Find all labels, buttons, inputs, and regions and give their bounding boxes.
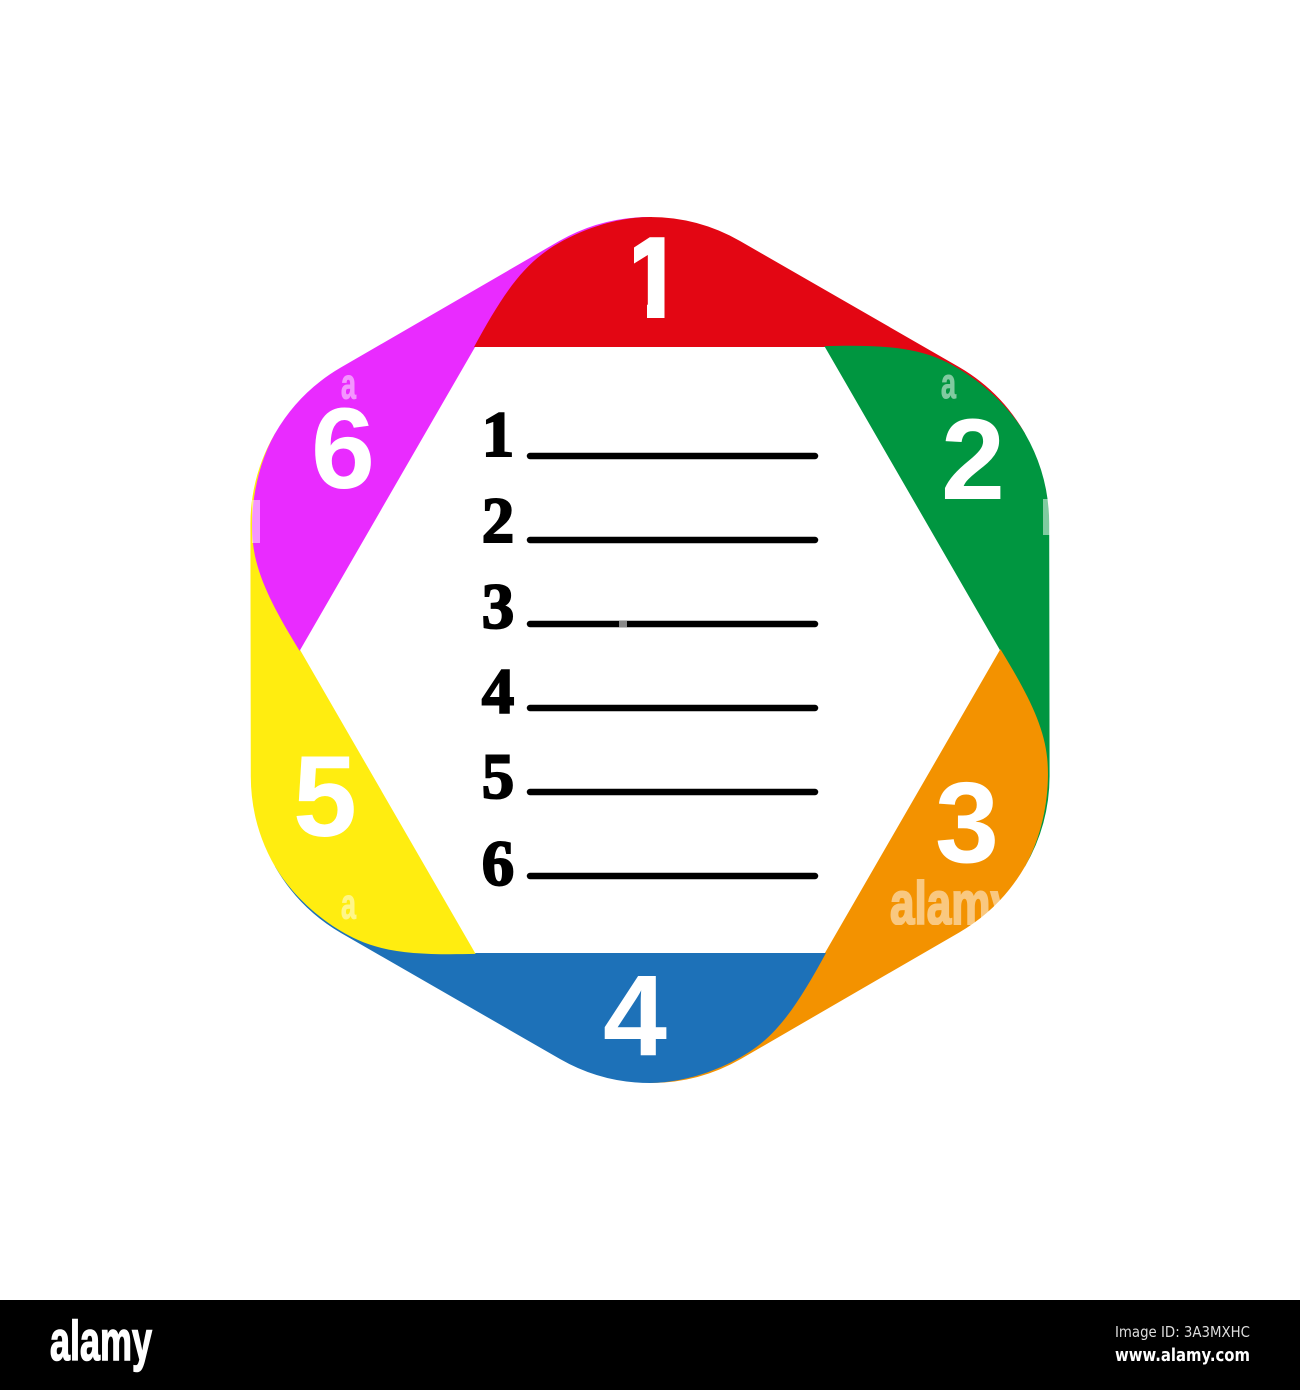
list item 4: 4	[482, 656, 514, 728]
footer logo: alamy	[50, 1309, 152, 1372]
segment 6: magenta	[187, 109, 650, 694]
footer bar	[0, 1300, 1300, 1390]
red segment leading edge overlapping magenta	[474, 217, 652, 347]
list item 3: 3	[482, 571, 514, 643]
number 5: 5	[293, 733, 357, 861]
watermarks on segments: a	[341, 880, 357, 928]
list item 5: 5	[482, 741, 514, 813]
segment 3: orange	[650, 606, 1113, 1191]
watermarks on segments: a	[941, 360, 957, 408]
list item 1: 1	[482, 399, 514, 471]
segment 1: red	[474, 217, 1025, 434]
number 2: 2	[941, 396, 1005, 524]
segment 5: yellow	[88, 433, 551, 1019]
list item 2: 2	[482, 485, 514, 557]
segment 4: blue	[275, 866, 826, 1083]
watermarks on segments	[252, 360, 1050, 937]
number 6: 6	[311, 385, 375, 513]
segment 2: green	[749, 281, 1212, 867]
number 3: 3	[935, 759, 999, 887]
website: www.alamy.com	[1115, 1345, 1250, 1366]
watermarks on segments: alamy	[890, 870, 1015, 937]
number 1: 1	[623, 215, 686, 343]
central list	[482, 399, 815, 900]
image id: Image ID: 3A3MXHC	[1115, 1323, 1250, 1341]
number 4: 4	[603, 952, 667, 1080]
list item 6: 6	[482, 828, 514, 900]
watermarks on segments: a	[341, 360, 357, 408]
list item 3	[482, 571, 815, 643]
